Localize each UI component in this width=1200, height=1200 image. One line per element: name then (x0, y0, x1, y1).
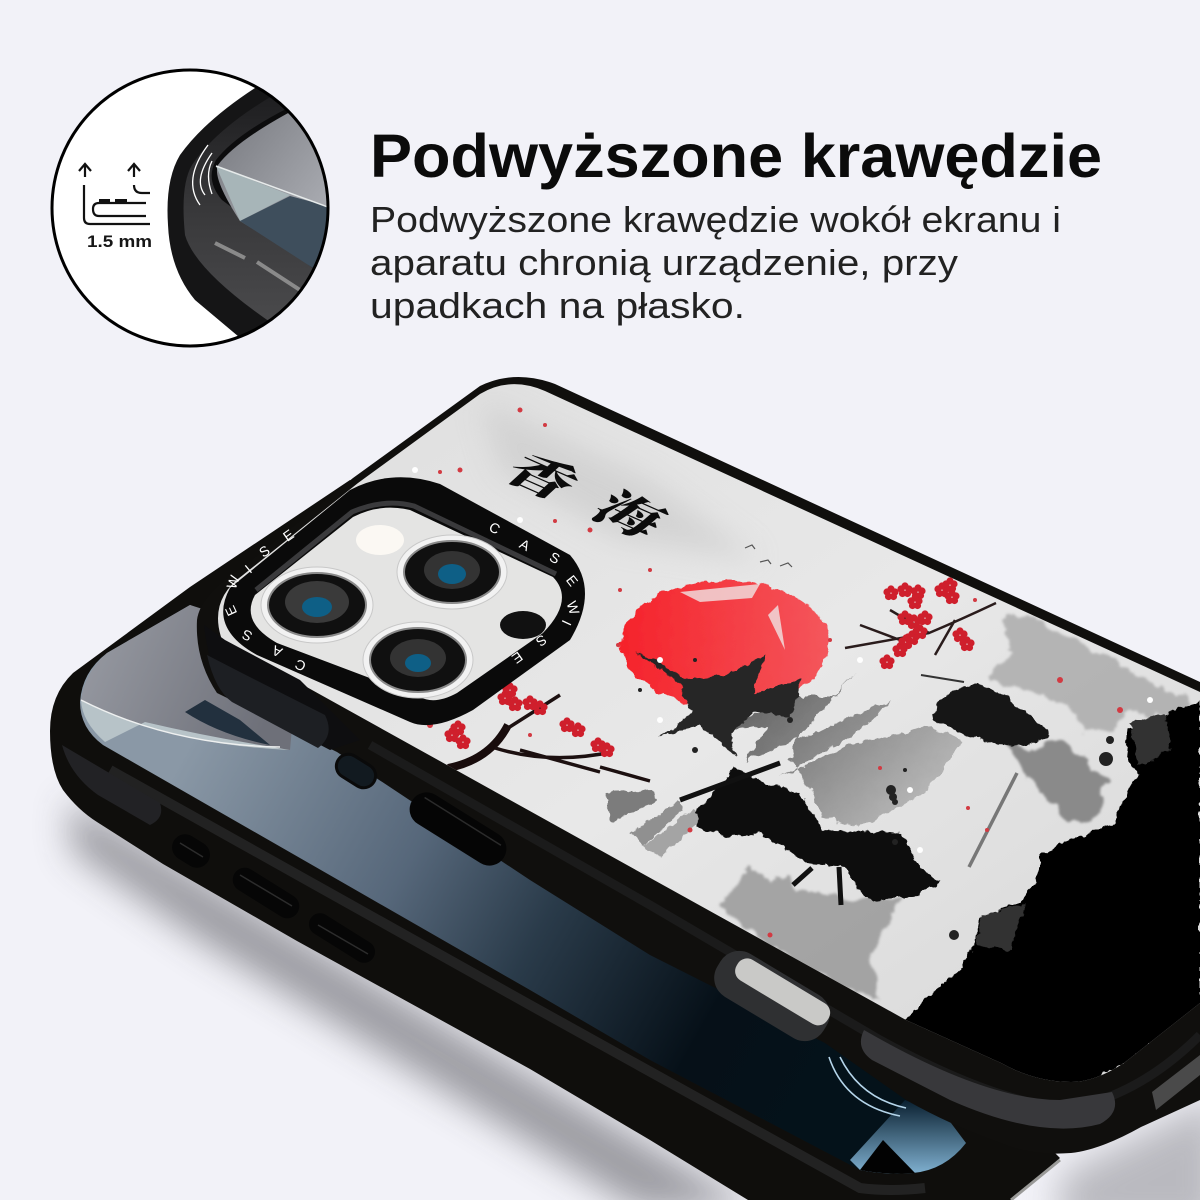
grey trees lower (715, 870, 905, 1000)
rear phone screen (80, 605, 966, 1174)
frame highlight (370, 745, 1200, 1108)
speaker grille (1152, 1055, 1200, 1110)
description text: Podwyższone krawędzie wokół ekranu i (370, 199, 1061, 240)
printed back panel (218, 384, 1200, 1082)
sensor (500, 611, 546, 639)
callout: raised edge detail circle (52, 70, 345, 346)
red and grey ink splatter (427, 408, 1123, 938)
grey trees upper right (990, 615, 1190, 738)
bump lower body (204, 625, 360, 750)
birds (745, 545, 792, 567)
ring lettering: CASEWISE (487, 519, 583, 667)
ring lettering: CASEWISE (222, 526, 308, 675)
description text (370, 199, 1061, 326)
screen upper wallpaper (81, 605, 300, 750)
cherry blossom right (845, 577, 996, 669)
calligraphy: 海 (580, 484, 678, 546)
lens plate (251, 508, 562, 700)
mic slot (332, 750, 380, 792)
case frame (197, 377, 1200, 1154)
upper samurai (921, 675, 1109, 867)
calligraphy (508, 455, 669, 536)
small grey pagoda (606, 790, 700, 857)
paper mottling (490, 414, 730, 554)
dark pagoda (634, 650, 801, 755)
cherry blossom left (444, 682, 650, 781)
drop shadows (70, 800, 1200, 1200)
lenses (261, 535, 507, 698)
ring inner edge (256, 503, 556, 590)
ring lettering (222, 519, 583, 675)
carbon corner patch (861, 1030, 1115, 1129)
description text: aparatu chronią urządzenie, przy (370, 242, 958, 283)
label: 1.5 mm: 1.5 mm (87, 232, 152, 251)
grey pagoda (715, 673, 963, 827)
front phone case (197, 377, 1200, 1154)
power button (403, 786, 513, 872)
lower samurai (680, 763, 939, 905)
black ink mass (900, 700, 1200, 1095)
rear phone case with screen (50, 480, 1060, 1200)
charging port (706, 943, 838, 1049)
flash (356, 525, 404, 555)
screen light fan (829, 1057, 966, 1174)
camera bump (204, 477, 585, 750)
side buttons (167, 829, 379, 967)
carbon corner patch (62, 745, 161, 825)
title: Podwyższone krawędzie (370, 122, 1102, 190)
calligraphy: 香 (493, 446, 591, 508)
red sun (621, 581, 829, 707)
panel artwork (412, 400, 1200, 1095)
bump ring (223, 477, 585, 725)
description text: upadkach na płasko. (370, 285, 745, 326)
rear case frame (50, 480, 1060, 1200)
icon: raised edge diagram (79, 164, 150, 224)
